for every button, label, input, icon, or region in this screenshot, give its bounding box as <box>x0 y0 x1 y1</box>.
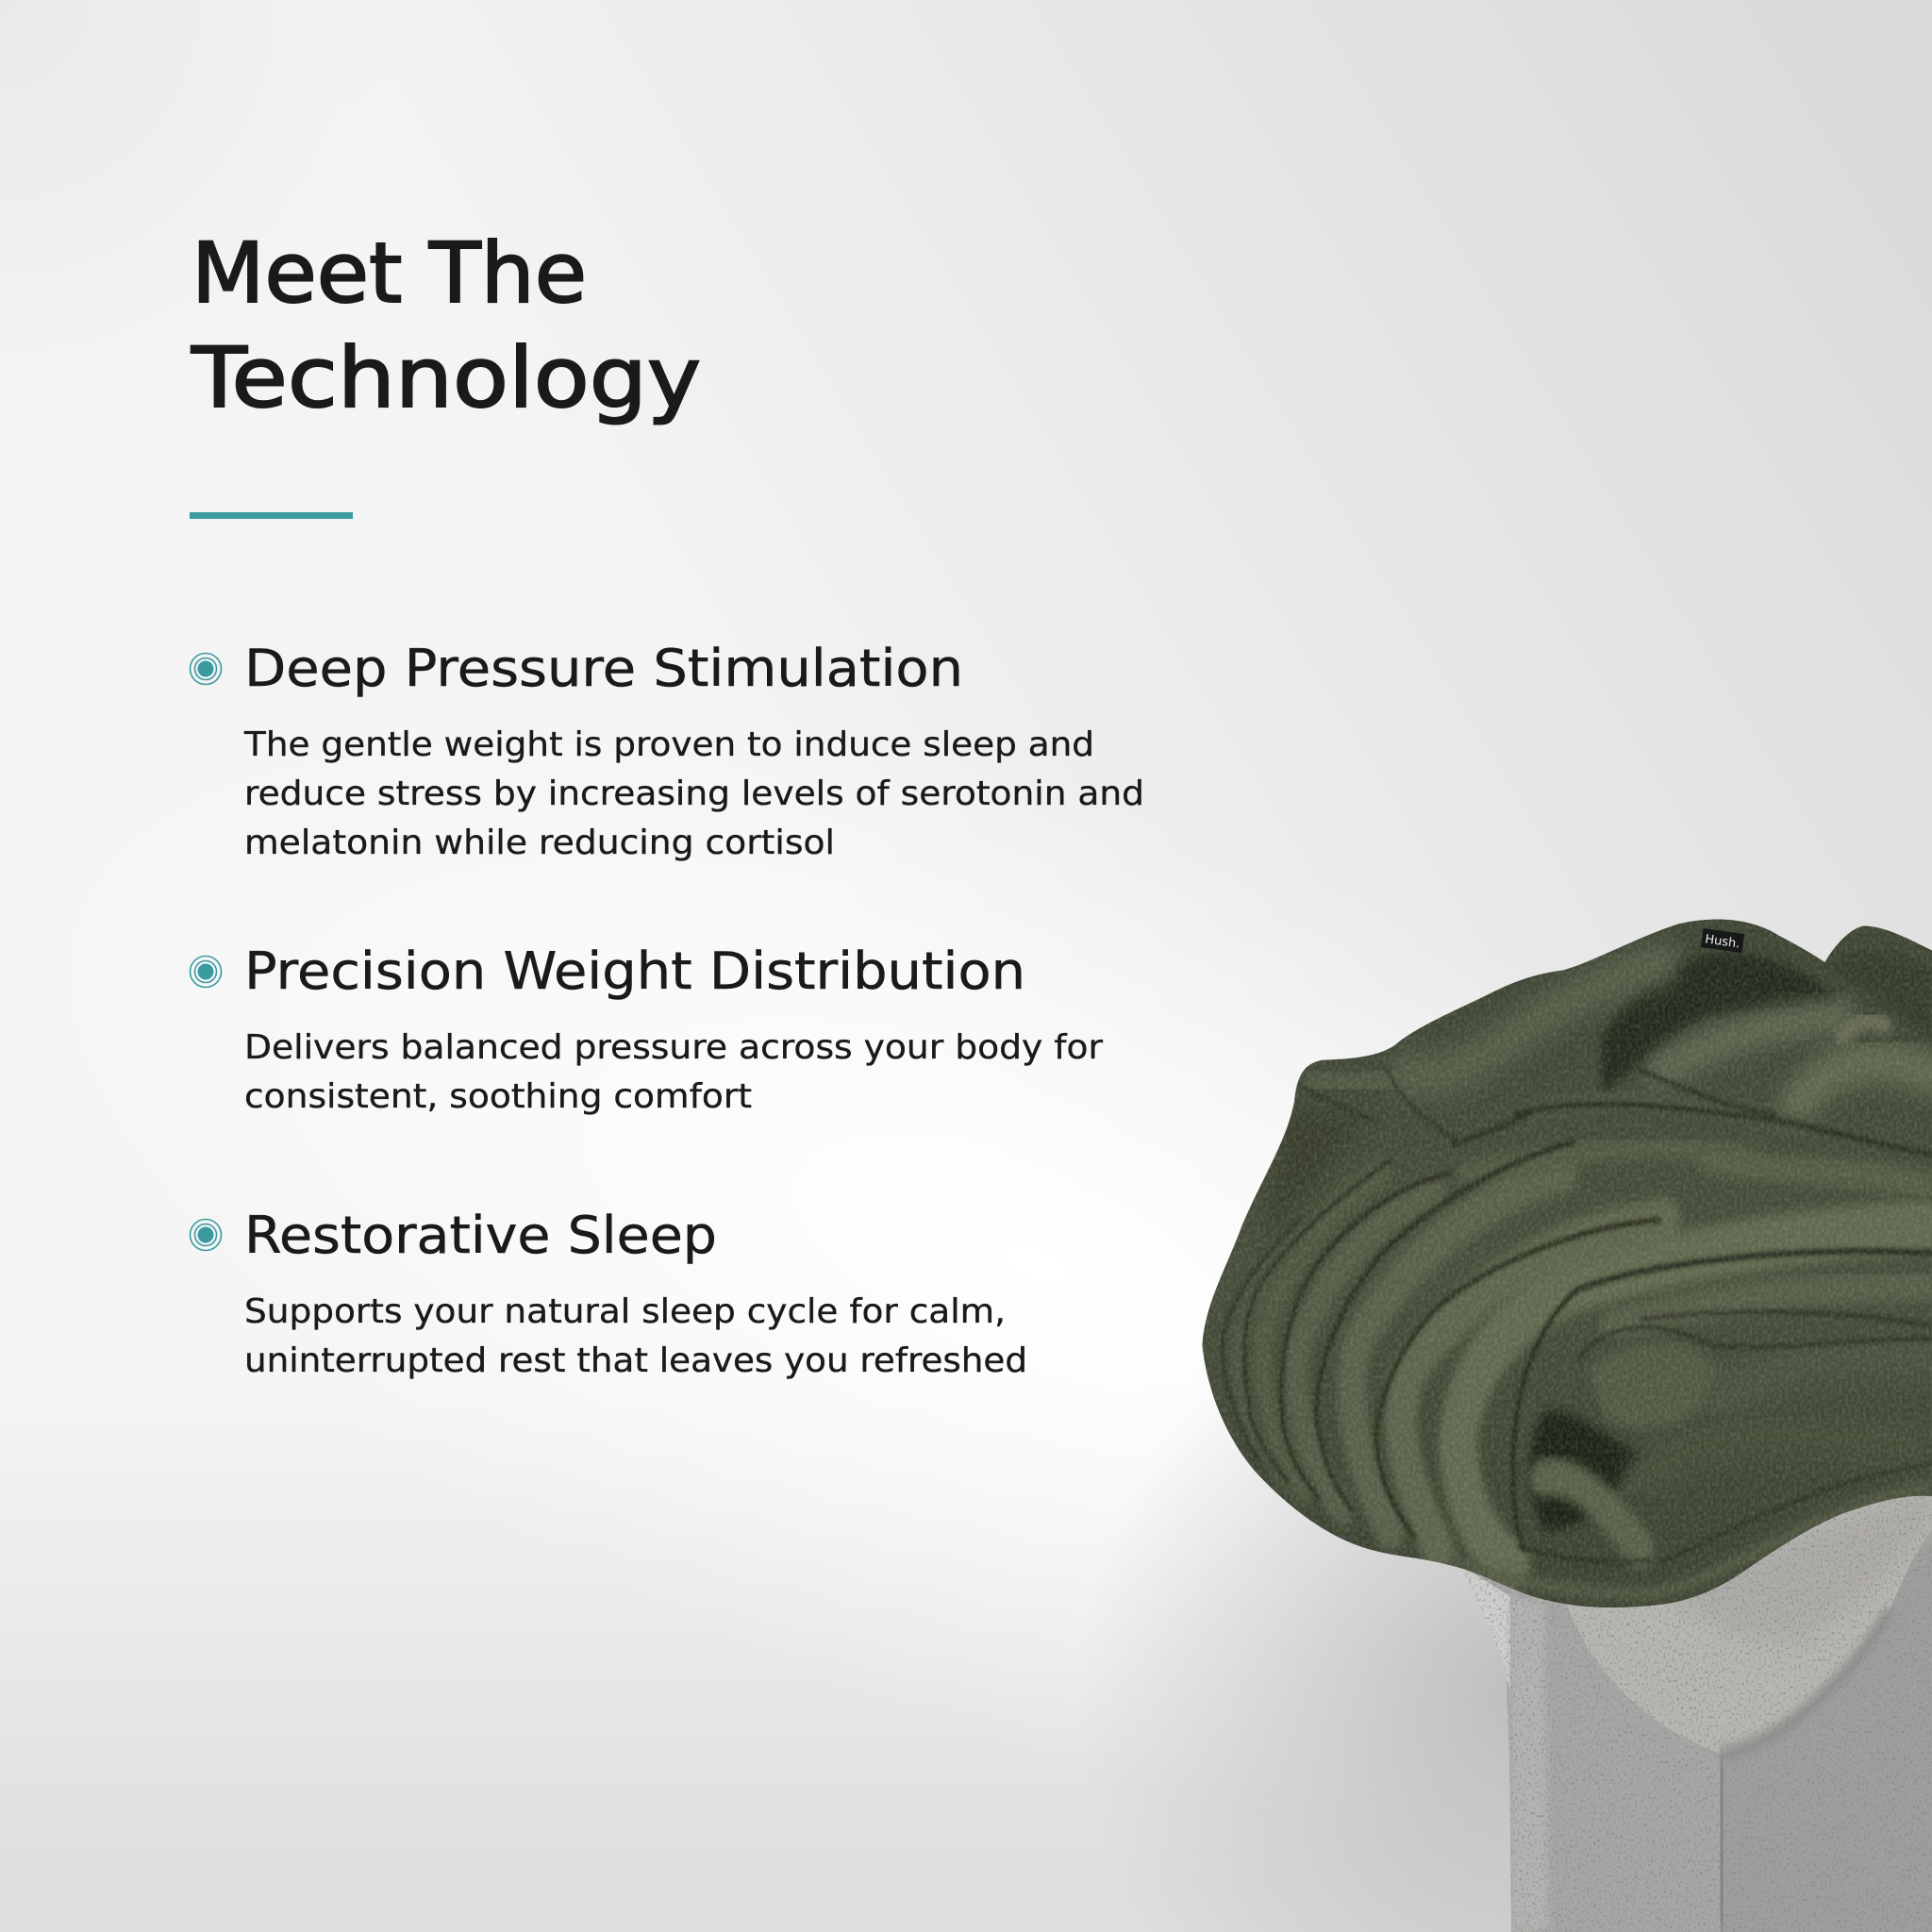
item: restorative sleep <box>191 1206 1027 1380</box>
dark inner folds <box>1602 953 1841 1094</box>
description <box>244 1292 1027 1380</box>
upper flap highlights <box>1313 962 1932 1127</box>
description: reduce stress by increasing levels of serotonin and <box>244 774 1144 813</box>
description: consistent, soothing comfort <box>244 1077 752 1116</box>
bullet icon <box>191 1219 221 1251</box>
dark creases <box>1223 1068 1932 1563</box>
product photo: blanket on concrete stand <box>1198 916 1932 1932</box>
bullet icon <box>191 653 221 685</box>
description: Supports your natural sleep cycle for calm, <box>244 1292 1006 1331</box>
description <box>243 725 1144 862</box>
title: Technology <box>191 329 701 426</box>
roll rib highlights <box>1237 1148 1932 1563</box>
concrete stand <box>1457 1477 1932 1932</box>
bottom lip highlight <box>1448 1488 1932 1593</box>
teal divider <box>190 512 353 519</box>
brand tag: Hush. <box>1704 932 1740 951</box>
brand tag <box>1701 928 1744 953</box>
heading: Restorative Sleep <box>244 1206 717 1265</box>
heading: Deep Pressure Stimulation <box>244 639 963 698</box>
title <box>191 225 701 426</box>
description <box>244 1028 1103 1116</box>
description: uninterrupted rest that leaves you refreshed <box>244 1341 1027 1380</box>
item: precision weight distribution <box>191 941 1103 1116</box>
blanket <box>1198 916 1932 1616</box>
heading: Precision Weight Distribution <box>244 941 1025 1001</box>
blanket and stand artwork <box>1198 916 1932 1932</box>
title: Meet The <box>192 225 587 322</box>
description: Delivers balanced pressure across your body for <box>244 1028 1103 1067</box>
item: deep pressure stimulation <box>191 639 1144 862</box>
fur texture <box>1198 916 1932 1616</box>
bullet icon <box>191 957 221 987</box>
description: The gentle weight is proven to induce sleep and <box>243 725 1094 764</box>
description: melatonin while reducing cortisol <box>244 824 835 862</box>
